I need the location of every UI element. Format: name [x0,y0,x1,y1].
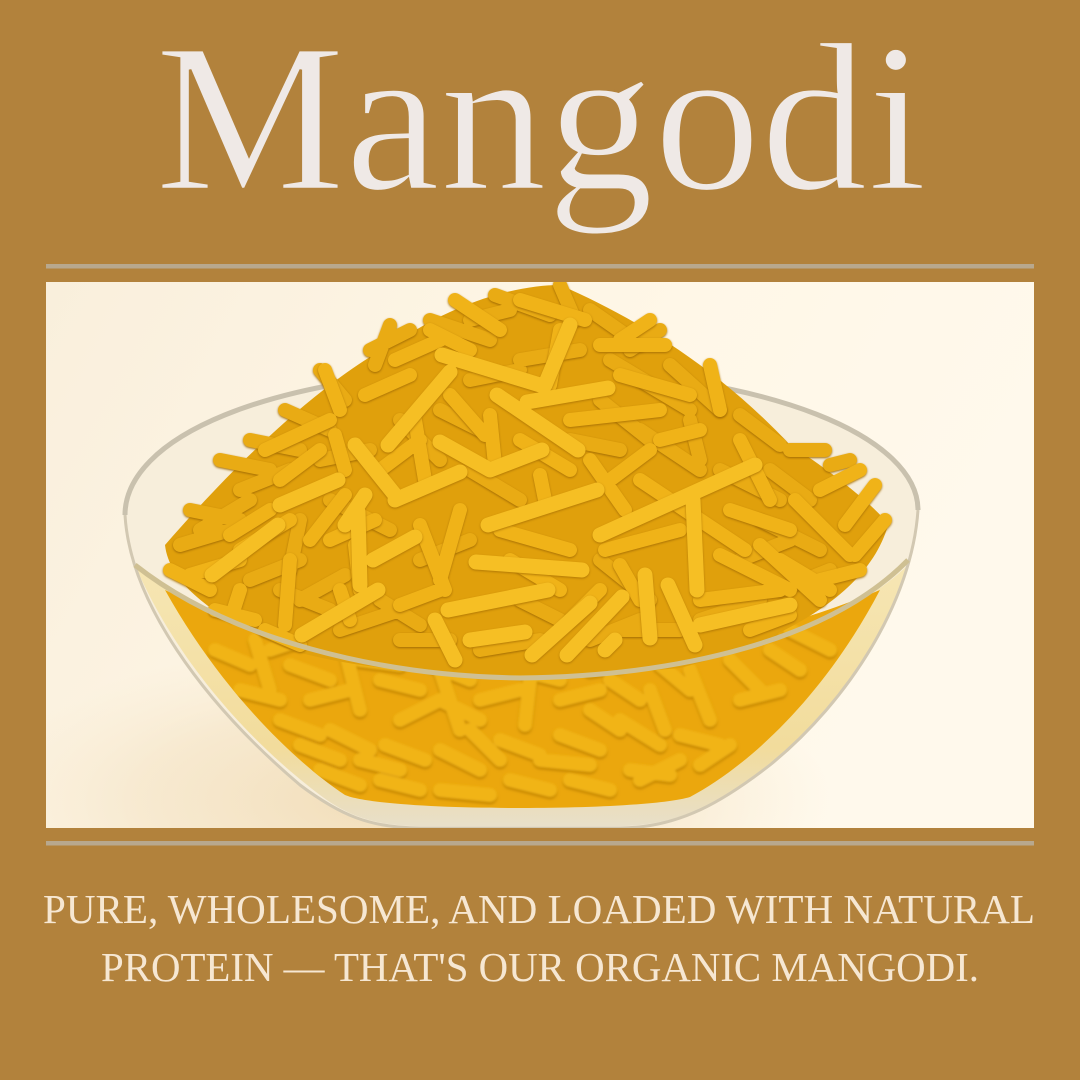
caption [43,886,1035,990]
glass bowl [125,368,918,828]
table shadow [66,697,762,828]
photo panel [46,282,1034,828]
mangodi mound [165,285,888,675]
front rim highlight [135,560,908,678]
caption line 1: PURE, WHOLESOME, AND LOADED WITH NATURAL [43,886,1035,932]
caption line 2: PROTEIN — THAT'S OUR ORGANIC MANGODI. [101,944,979,990]
title: Mangodi [155,0,927,235]
bottom divider [46,841,1034,846]
mangodi in lower bowl [165,590,880,808]
top divider [46,264,1034,268]
infographic canvas [44,43,1034,982]
